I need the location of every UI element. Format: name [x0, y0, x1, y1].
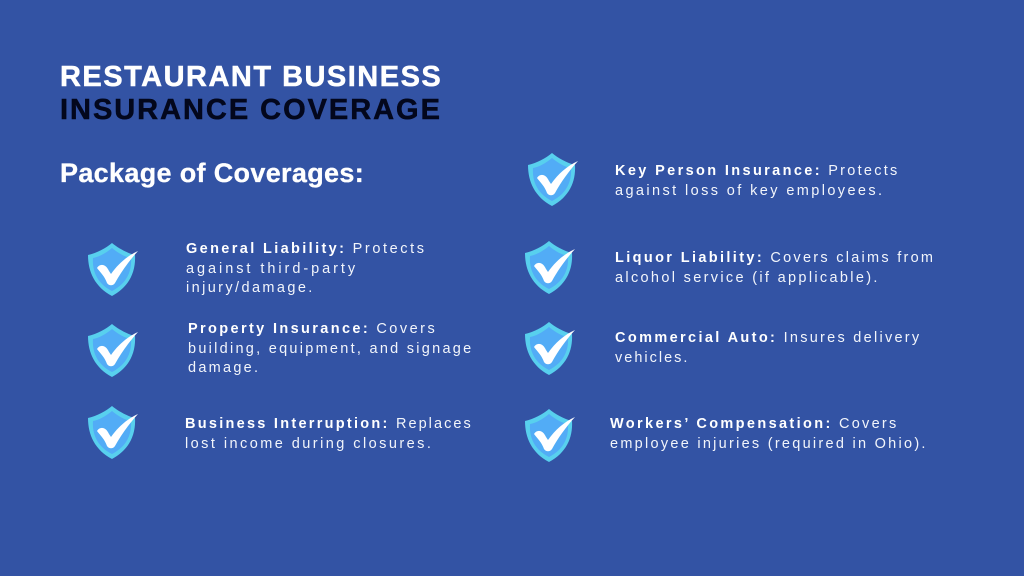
text: property insurance: Property Insurance: Covers — [188, 321, 437, 337]
text: property insurance: building, equipment, and signage — [188, 341, 473, 357]
text: workers compensation: employee injuries (required in Ohio). — [610, 436, 928, 452]
text: key person insurance: against loss of key employees. — [615, 183, 884, 199]
text: key person insurance: Key Person Insurance: Protects — [615, 163, 900, 179]
text: property insurance: damage. — [188, 360, 260, 376]
icon: shield general liability — [88, 243, 138, 296]
text: general liability: against third-party — [186, 261, 358, 277]
text: liquor liability: alcohol service (if applicable). — [615, 270, 880, 286]
text: commercial auto: Commercial Auto: Insures delivery — [615, 330, 921, 346]
icon: shield key person — [528, 153, 578, 206]
text: general liability — [186, 241, 427, 296]
text: general liability: General Liability: Protects — [186, 241, 427, 257]
text: business interruption: Business Interruption: Replaces — [185, 416, 473, 432]
text: commercial auto — [615, 330, 921, 366]
text: property insurance — [188, 321, 473, 376]
text: liquor liability — [615, 250, 935, 286]
title second line: INSURANCE COVERAGE — [60, 94, 442, 126]
title: RESTAURANT BUSINESS — [60, 61, 442, 93]
text: workers compensation: Workers’ Compensation: Covers — [610, 416, 899, 432]
section heading: Package of Coverages: — [60, 158, 364, 188]
text: workers compensation — [610, 416, 928, 452]
text: liquor liability: Liquor Liability: Covers claims from — [615, 250, 935, 266]
icon: shield liquor liability — [525, 241, 575, 294]
text: business interruption: lost income during closures. — [185, 436, 433, 452]
text: commercial auto: vehicles. — [615, 350, 689, 366]
icon: shield commercial auto — [525, 322, 575, 375]
text: business interruption — [185, 416, 473, 452]
text: key person insurance — [615, 163, 900, 199]
icon: shield workers compensation — [525, 409, 575, 462]
text: general liability: injury/damage. — [186, 280, 315, 296]
icon: shield business interruption — [88, 406, 138, 459]
icon: shield property insurance — [88, 324, 138, 377]
